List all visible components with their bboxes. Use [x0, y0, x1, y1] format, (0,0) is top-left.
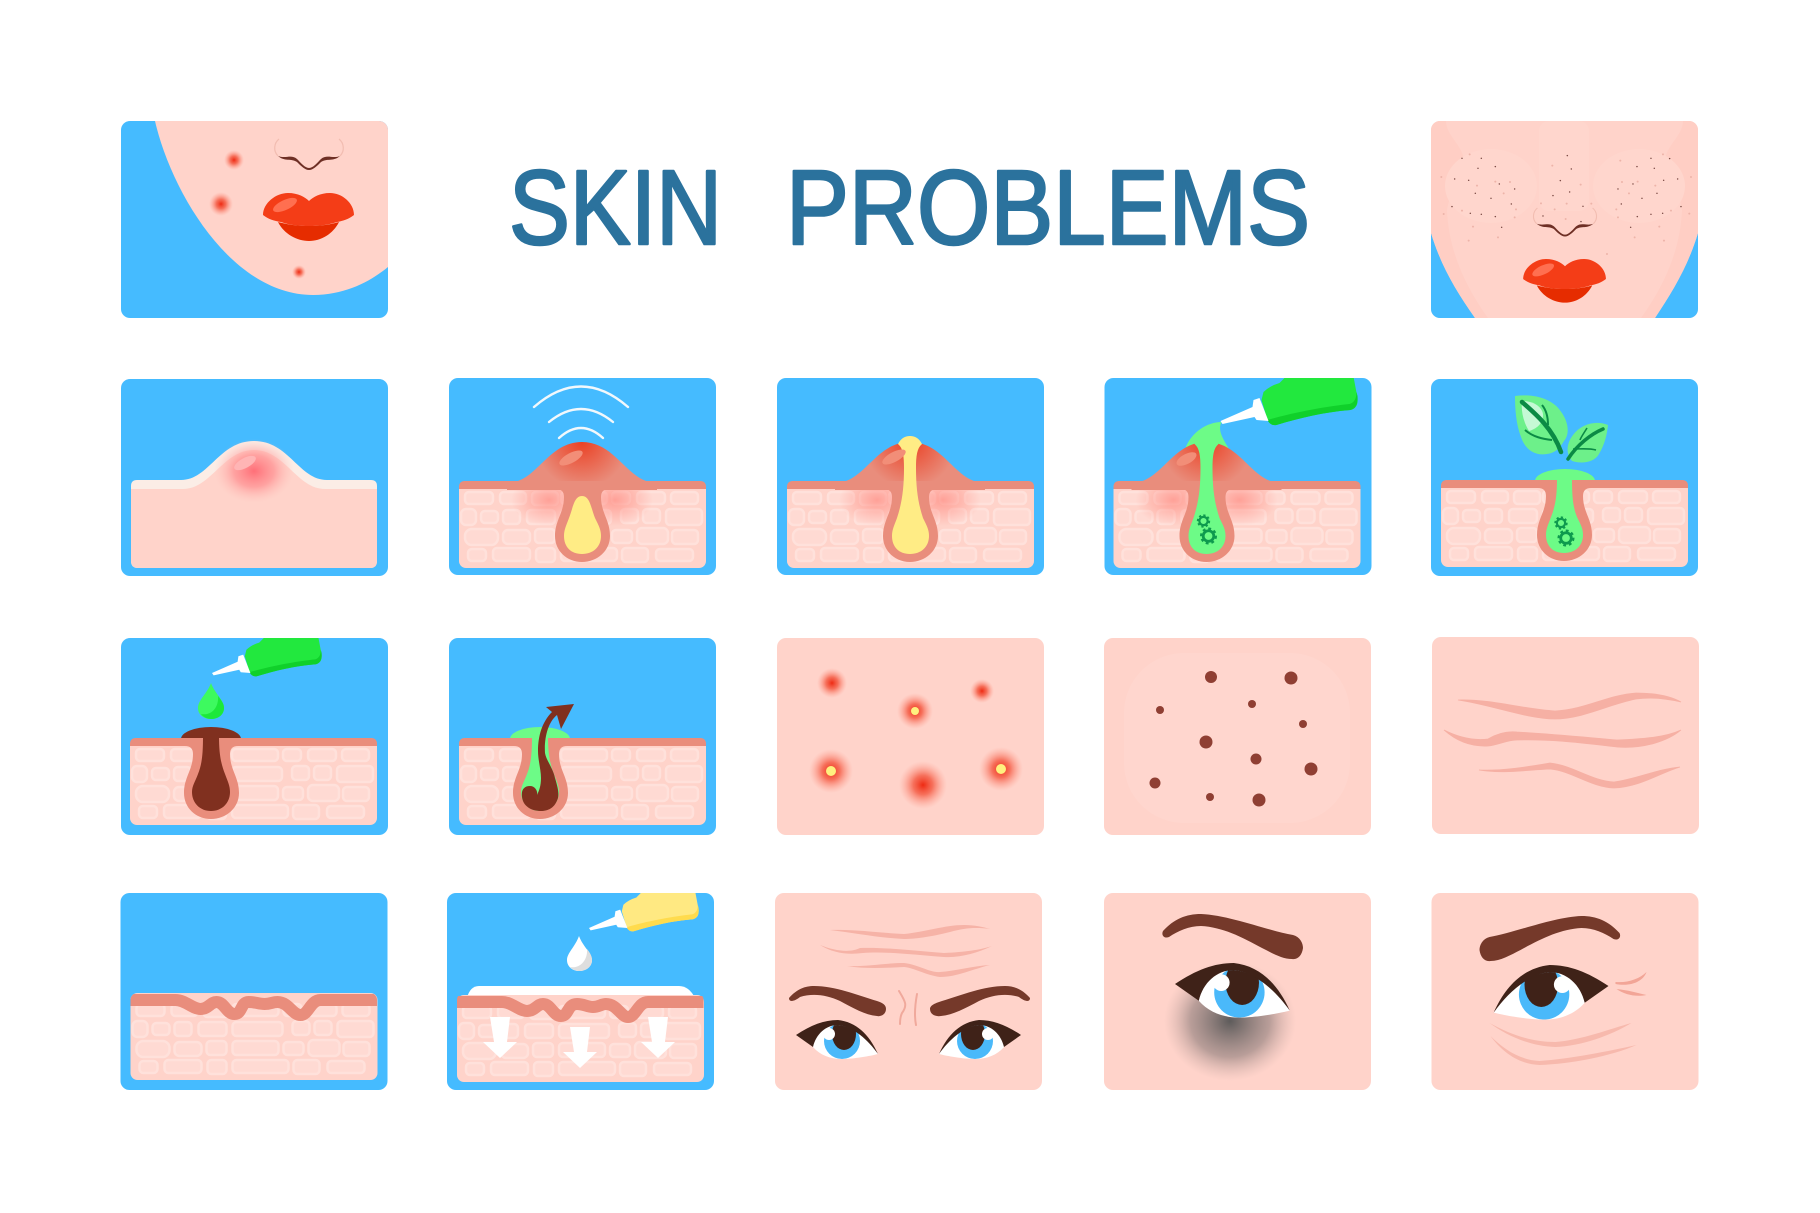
green bottle: [212, 629, 322, 676]
gloss highlight: [882, 450, 906, 464]
uneven epidermis: [452, 1002, 709, 1017]
panel: skin bump: [121, 379, 388, 576]
panel: pus reaching surface: [777, 378, 1044, 575]
pus: [564, 496, 601, 554]
skin layer: [459, 481, 706, 568]
panel: pimples on skin: [777, 638, 1044, 835]
yellow heads: [826, 707, 1006, 776]
skin layer: [459, 738, 706, 825]
freckles faint: [1440, 153, 1692, 255]
lips: [1523, 259, 1606, 303]
face skin: [155, 121, 388, 295]
pain waves: [534, 386, 628, 438]
gel cap: [1186, 422, 1228, 448]
follicle wall: [555, 481, 610, 562]
red spots: [809, 668, 1023, 809]
plug cap: [181, 727, 241, 751]
follicle wall: [178, 738, 244, 819]
nose: [1533, 208, 1597, 237]
epidermis band: [459, 481, 706, 489]
epidermis band: [1114, 481, 1360, 489]
redness: [844, 490, 976, 522]
large leaf: [1515, 395, 1568, 454]
epidermis band: [459, 738, 706, 746]
green bottle: [1220, 366, 1358, 425]
bump: [507, 442, 657, 490]
eye: [1175, 960, 1290, 1018]
white drop: [567, 936, 592, 971]
bump: [1132, 442, 1282, 490]
panel: green treatment on pimple: [1104, 366, 1372, 575]
follicle wall: [883, 481, 938, 562]
crow's feet wrinkles: [1616, 972, 1646, 996]
skin layer: [1114, 481, 1360, 568]
bump: [835, 442, 985, 490]
arrow pulling out plug: [522, 704, 574, 811]
epidermis band: [787, 481, 1034, 489]
panel: dark circle under eye: [1104, 893, 1371, 1090]
follicle wall: [1174, 481, 1240, 562]
gloss highlight: [1174, 449, 1199, 469]
gloss highlight: [560, 450, 583, 466]
panel: forehead wrinkles and frown: [775, 893, 1042, 1090]
inner skin: [131, 450, 377, 568]
title: SKIN: [509, 149, 722, 267]
skin layer: [130, 738, 377, 825]
redness: [516, 490, 648, 522]
small leaf: [1568, 423, 1608, 463]
forehead wrinkles: [820, 925, 992, 977]
title: [509, 149, 1310, 267]
pimples on face: [209, 150, 306, 279]
epidermis band: [1441, 480, 1688, 488]
bacteria gears: [1198, 515, 1216, 543]
panel: inflamed follicle with yellow pus: [449, 378, 716, 575]
cheeks and nose highlight: [1445, 156, 1685, 202]
gel cap: [510, 727, 570, 751]
left eyebrow: [789, 986, 886, 1016]
green drop: [198, 683, 224, 719]
epidermis band: [130, 738, 377, 746]
panel: crow's feet and eye bags: [1432, 893, 1698, 1090]
skin layer: [1441, 480, 1688, 567]
bacteria gears: [1555, 517, 1573, 545]
lips: [263, 193, 354, 241]
eye: [1494, 962, 1608, 1020]
inflamed spot: [218, 440, 290, 498]
dark spots: [1150, 671, 1318, 806]
light skin surface: [131, 441, 377, 568]
down arrows: [483, 1017, 675, 1068]
panel: blackhead dots: [1104, 638, 1371, 835]
face shading: [1431, 121, 1698, 318]
redness: [1141, 490, 1272, 522]
blackhead plug: [192, 736, 230, 811]
gel cap: [1535, 469, 1595, 493]
panel: wrinkled skin cross-section: [120, 893, 388, 1090]
skin layer: [787, 481, 1034, 568]
white cream layer: [467, 986, 695, 1013]
right eyebrow: [930, 986, 1030, 1016]
blue corners: [1431, 233, 1698, 318]
left eye: [796, 1018, 878, 1059]
lighter skin patch: [1124, 653, 1350, 823]
right eye: [939, 1018, 1021, 1059]
panel: skin wrinkles: [1432, 637, 1699, 834]
panel: moisturiser penetrating skin: [447, 884, 714, 1090]
gel lumen: [1546, 479, 1583, 553]
panel: freckled face: [1431, 121, 1698, 318]
panel: blackhead with green drop: [121, 629, 388, 835]
yellow bottle: [589, 884, 699, 931]
skin layer: [457, 995, 704, 1082]
freckles dark: [1451, 155, 1682, 228]
nose: [275, 139, 343, 170]
skin layer: [130, 993, 378, 1080]
panel: acne on face: [121, 121, 388, 318]
eyebrow: [1480, 916, 1620, 961]
frown lines: [899, 991, 917, 1025]
uneven epidermis: [126, 1000, 382, 1015]
title: PROBLEMS: [786, 149, 1310, 267]
under-eye wrinkles: [1490, 1023, 1636, 1065]
wrinkle lines: [1444, 693, 1681, 788]
follicle wall: [507, 738, 573, 819]
eyebrow: [1162, 914, 1303, 959]
gel lumen: [521, 736, 559, 811]
follicle wall: [1531, 480, 1597, 561]
gloss highlight: [234, 456, 256, 470]
panel: blackhead removed with arrow: [449, 638, 716, 835]
gel tube: [1188, 436, 1226, 554]
pus tube: [892, 436, 929, 554]
under-eye shadow: [1164, 961, 1296, 1081]
panel: leaf extract on follicle: [1431, 379, 1698, 576]
